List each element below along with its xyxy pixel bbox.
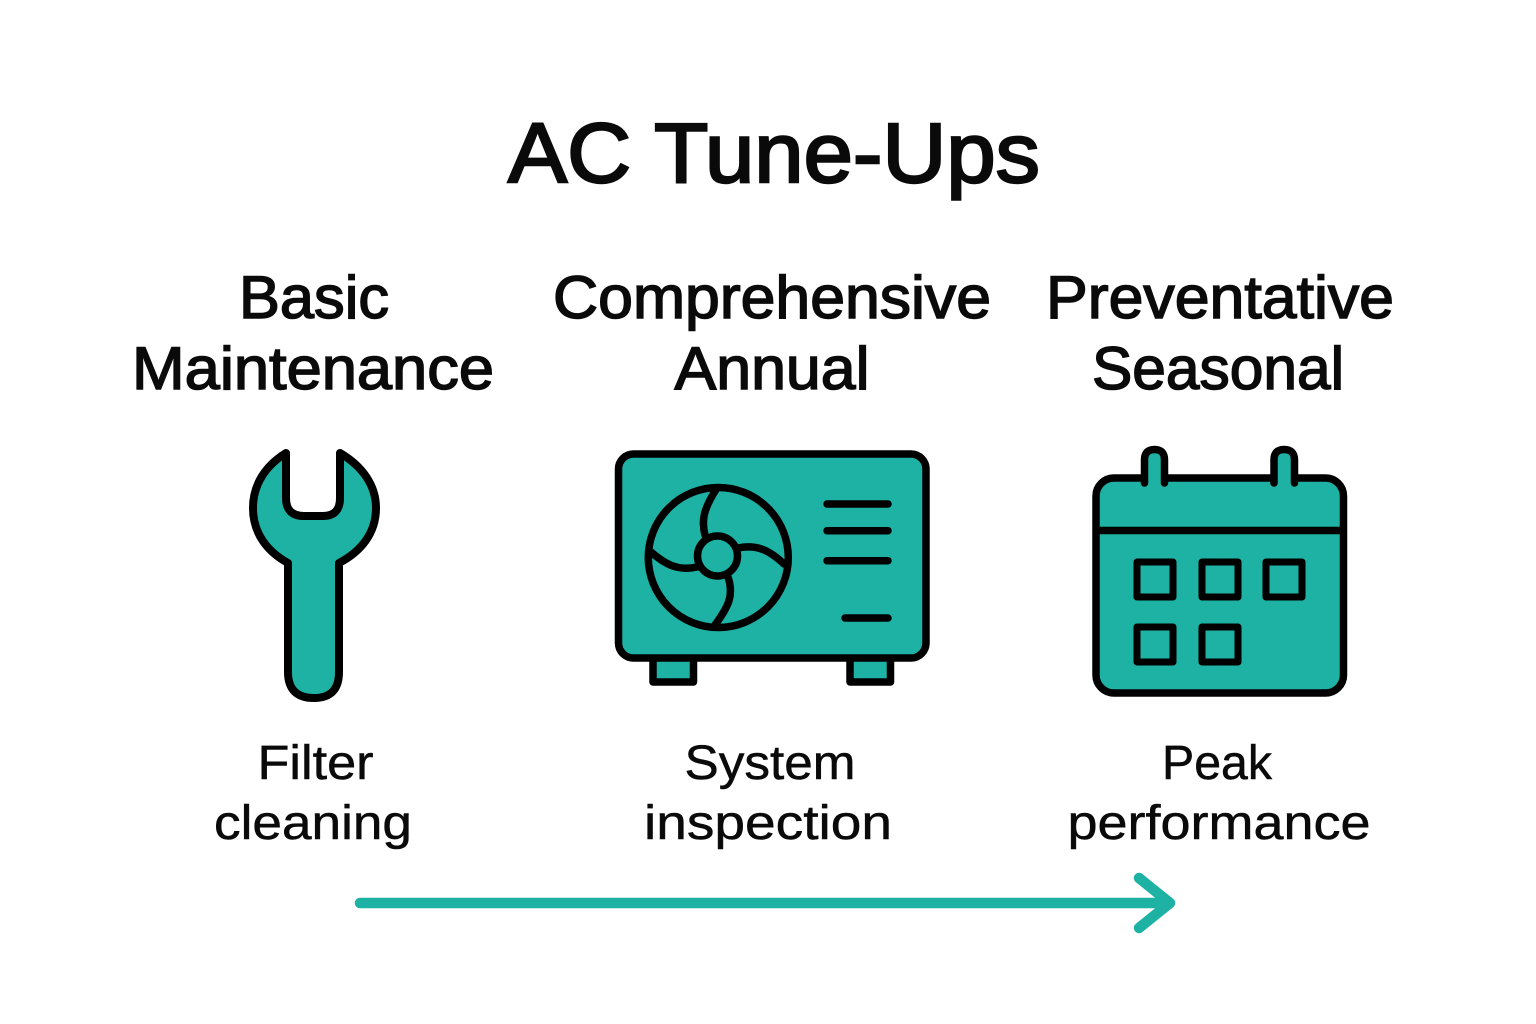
label: peak performance: performance <box>1068 797 1370 850</box>
heading: comprehensive annual <box>553 264 991 402</box>
heading: basic maintenance: Maintenance <box>132 335 494 402</box>
icon: wrench <box>253 453 376 698</box>
fan <box>648 488 788 628</box>
title: AC Tune-Ups <box>508 106 1040 200</box>
arrow <box>360 878 1170 928</box>
calendar rings <box>1144 450 1294 483</box>
label: system inspection <box>644 737 892 850</box>
heading: preventative seasonal: Seasonal <box>1092 335 1344 402</box>
heading: preventative seasonal: Preventative <box>1046 264 1394 331</box>
day squares <box>1137 562 1302 662</box>
heading: comprehensive annual: Annual <box>674 335 870 402</box>
header line <box>1098 527 1341 534</box>
heading: preventative seasonal <box>1046 264 1394 402</box>
label: filter cleaning <box>214 737 412 850</box>
vents <box>827 504 888 618</box>
icon: ac unit <box>618 454 926 682</box>
heading: comprehensive annual: Comprehensive <box>553 264 991 331</box>
label: filter cleaning: Filter <box>258 737 374 790</box>
label: system inspection: System <box>684 737 856 790</box>
heading: basic maintenance <box>132 264 494 402</box>
unit body <box>618 454 926 658</box>
unit feet <box>653 655 890 682</box>
calendar body <box>1096 478 1344 693</box>
label: peak performance <box>1068 737 1370 850</box>
heading: basic maintenance: Basic <box>239 264 389 331</box>
label: filter cleaning: cleaning <box>214 797 412 850</box>
label: peak performance: Peak <box>1162 737 1273 790</box>
icon: calendar <box>1096 450 1344 693</box>
label: system inspection: inspection <box>644 797 892 850</box>
